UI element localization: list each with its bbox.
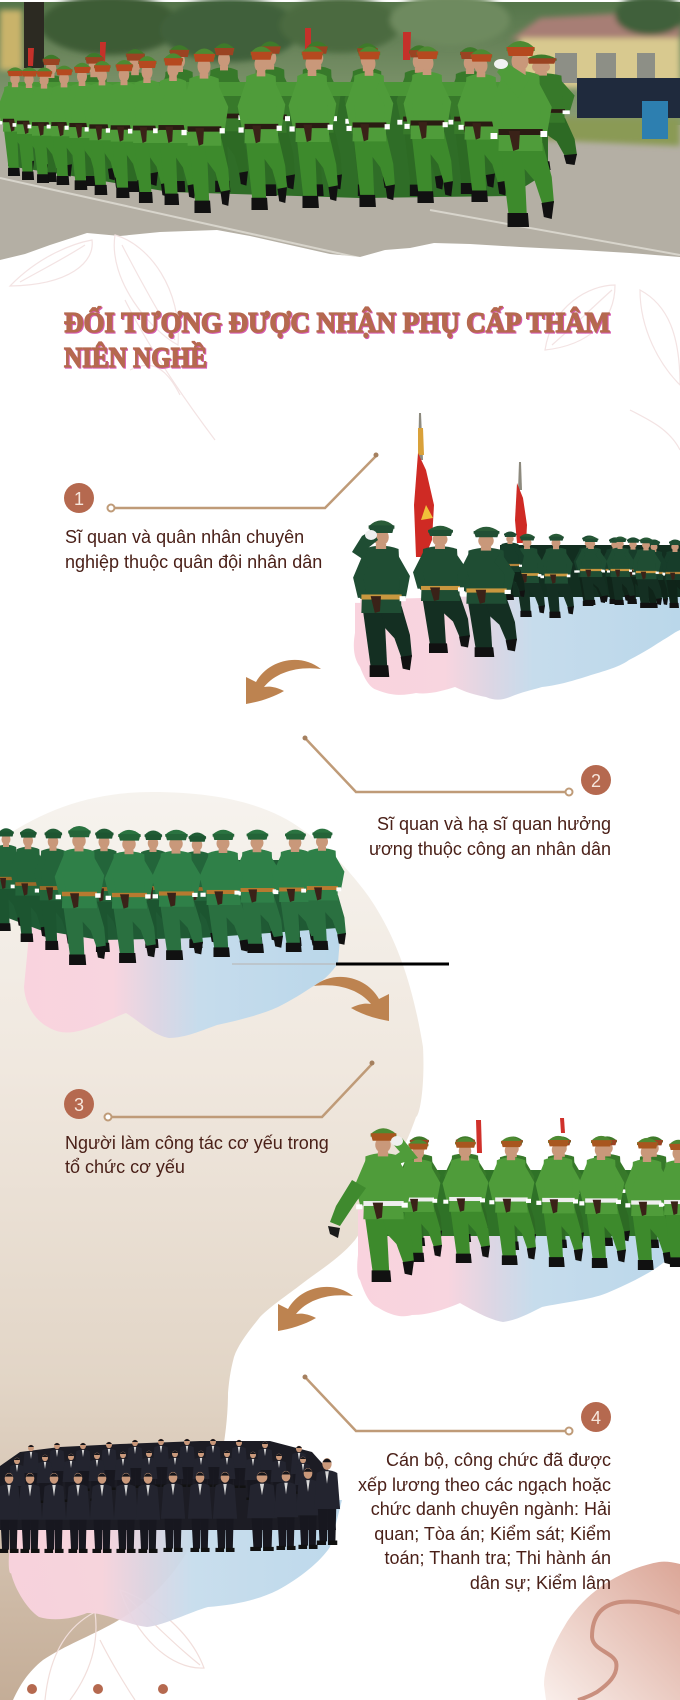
step 1: flags xyxy=(414,413,527,557)
step 4: text: chức danh chuyên ngành: Hải xyxy=(371,1499,611,1519)
step 3: number badge: 3 xyxy=(74,1095,84,1115)
arrow 1 xyxy=(246,660,321,704)
step 2: watercolor blob xyxy=(24,913,342,1038)
step 1: text: Sĩ quan và quân nhân chuyên xyxy=(65,527,304,547)
step 3: text: Người làm công tác cơ yếu trong xyxy=(65,1133,329,1153)
step 4: number badge: 4 xyxy=(591,1408,601,1428)
step 3: text: tổ chức cơ yếu xyxy=(65,1157,185,1177)
arrow 3 xyxy=(278,1287,353,1331)
step 4: connector line xyxy=(302,1374,572,1434)
step 4: watercolor blob xyxy=(9,1500,342,1627)
step 1: text: nghiệp thuộc quân đội nhân dân xyxy=(65,552,322,572)
step 4: text: xếp lương theo các ngạch hoặc xyxy=(358,1475,611,1495)
step 3: number badge xyxy=(64,1089,94,1119)
step 3: flags xyxy=(476,1118,565,1153)
decorative leaves: bottom xyxy=(45,1590,204,1700)
torn paper edge xyxy=(0,230,680,275)
step 1: text xyxy=(65,527,322,572)
beige flowing background shape xyxy=(0,792,423,1700)
hero soldier formation xyxy=(0,41,577,227)
step 3: watercolor blob xyxy=(357,1200,680,1322)
arrow 2 xyxy=(314,977,389,1021)
step 2: text: lương thuộc công an nhân dân xyxy=(365,839,611,859)
step 3: text xyxy=(65,1133,329,1177)
step 1: connector line xyxy=(108,452,378,512)
step 1: watercolor blob xyxy=(354,590,680,700)
title xyxy=(64,305,610,374)
title: NIÊN NGHỀ xyxy=(64,340,207,374)
step 3: connector line xyxy=(104,1060,374,1120)
step 4: number badge xyxy=(581,1402,611,1432)
step 2: text xyxy=(365,814,611,859)
step 1: number badge: 1 xyxy=(74,489,84,509)
decorative corner shape with squiggle xyxy=(544,1562,680,1700)
hero photo: marching police xyxy=(0,0,680,261)
step 2: army soldiers xyxy=(0,826,346,965)
step 3: police soldiers xyxy=(328,1128,680,1282)
step 2: connector line xyxy=(302,736,572,796)
step 2: number badge xyxy=(581,765,611,795)
decorative leaves: top left xyxy=(10,235,215,440)
step 1: number badge xyxy=(64,483,94,513)
step 4: group of officials xyxy=(0,1439,340,1553)
step 4: text: dân sự; Kiểm lâm xyxy=(470,1573,611,1593)
step 4: text xyxy=(358,1450,611,1593)
step 4: text: Cán bộ, công chức đã được xyxy=(386,1450,611,1470)
decorative leaves: top right xyxy=(545,285,680,450)
step 2: text: Sĩ quan và hạ sĩ quan hưởng xyxy=(377,814,611,834)
step 4: text: toán; Thanh tra; Thi hành án xyxy=(384,1548,611,1568)
black rule xyxy=(232,962,449,966)
footer dots xyxy=(27,1684,168,1694)
title: ĐỐI TƯỢNG ĐƯỢC NHẬN PHỤ CẤP THÂM xyxy=(64,305,610,339)
step 1: army soldiers xyxy=(352,520,680,677)
step 4: text: quan; Tòa án; Kiểm sát; Kiểm xyxy=(374,1524,611,1544)
step 2: number badge: 2 xyxy=(591,771,601,791)
